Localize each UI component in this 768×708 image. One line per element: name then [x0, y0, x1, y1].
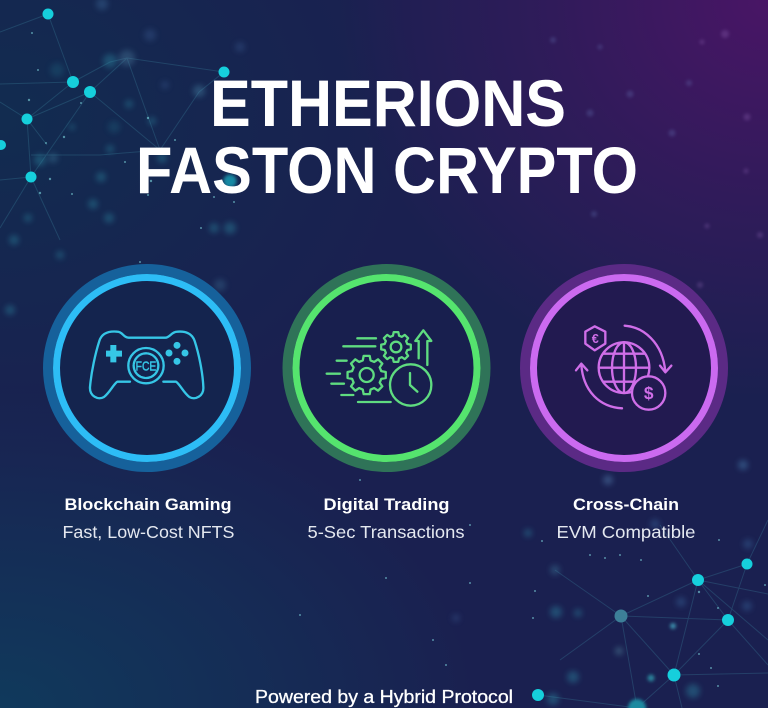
panel: digital trading: [288, 269, 486, 542]
icon: gears, clock and speed lines: [327, 330, 431, 406]
icon: game controller with FCE coin: FCE: [136, 359, 156, 374]
icon: globe with currency arrows: $: [644, 383, 654, 403]
sublabel: 5-sec transactions: 5-Sec Transactions: [308, 522, 465, 542]
label: digital trading: Digital Trading: [324, 495, 450, 514]
title: [136, 66, 638, 207]
sublabel: fast low-cost NFTs: Fast, Low-Cost NFTS: [62, 522, 234, 542]
sublabel: EVM compatible: EVM Compatible: [556, 522, 696, 542]
network background: top left: [0, 0, 245, 315]
green ring badge: [288, 269, 486, 467]
icon: game controller with FCE coin: [90, 332, 203, 398]
purple ring badge: [525, 269, 723, 467]
label: cross-chain: Cross-Chain: [573, 495, 679, 514]
panel: cross-chain: [525, 269, 723, 542]
icon: globe with currency arrows: €: [592, 332, 599, 346]
blue ring badge: [48, 269, 246, 467]
icon: globe with currency arrows: [576, 326, 671, 410]
footer: powered by: Powered by a Hybrid Protocol: [255, 686, 513, 707]
network background: bottom right: [299, 421, 768, 708]
panel: blockchain gaming: [48, 269, 246, 542]
network background: top right faint dots: [550, 30, 763, 288]
title: ETHERIONS: [210, 66, 566, 140]
label: blockchain gaming: Blockchain Gaming: [64, 495, 232, 514]
title: FASTON CRYPTO: [136, 133, 638, 207]
